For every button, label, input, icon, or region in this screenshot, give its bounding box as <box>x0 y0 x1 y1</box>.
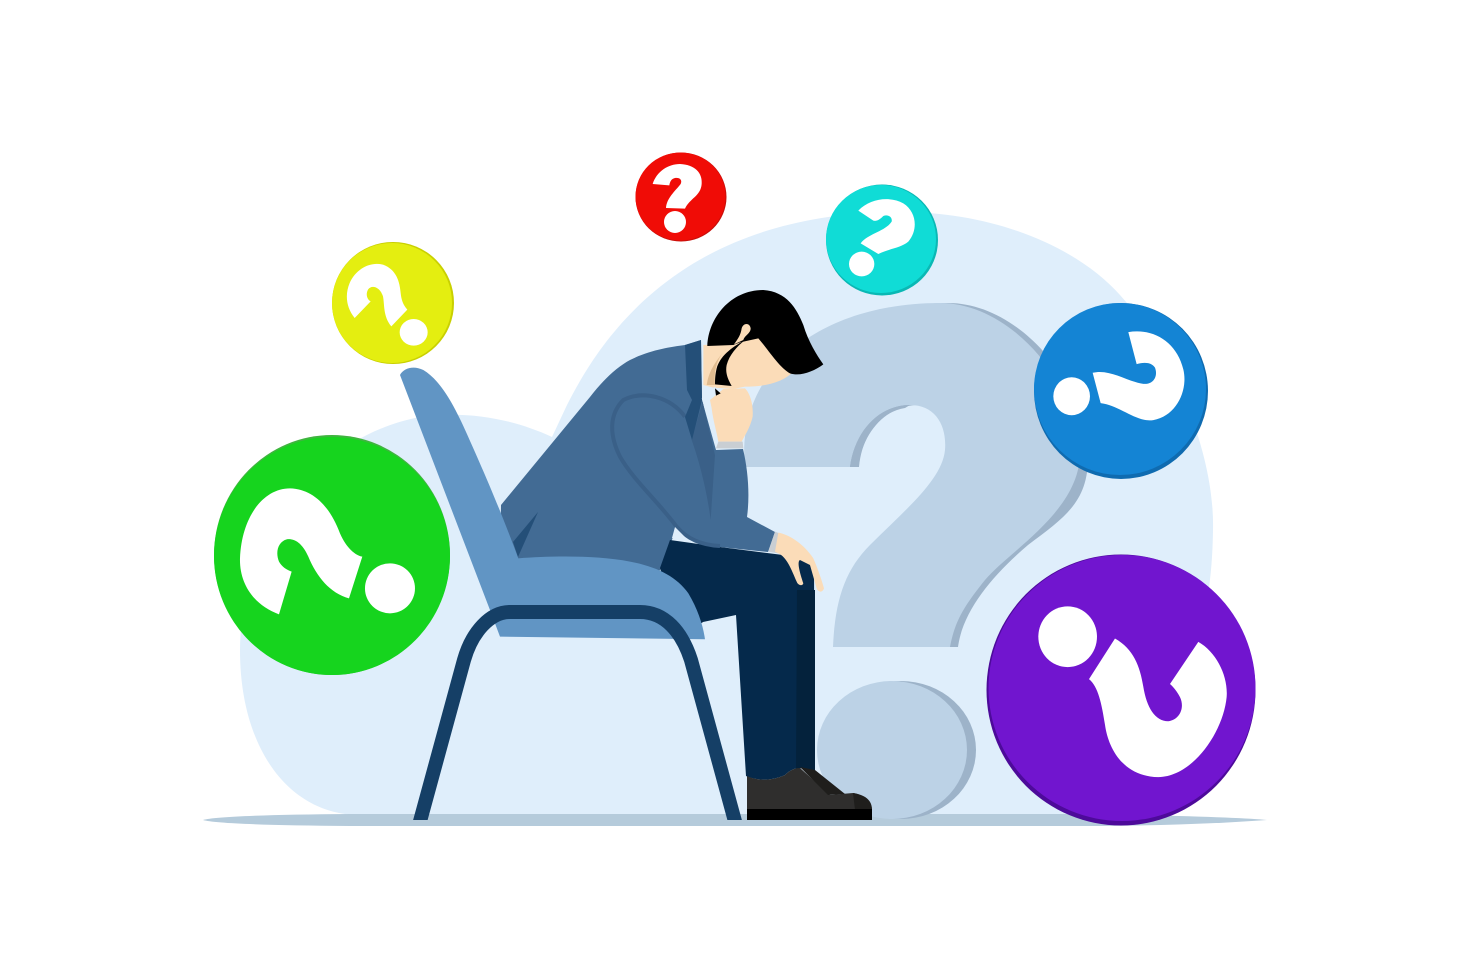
hair <box>707 290 823 374</box>
jacket sleeve outline <box>612 395 720 546</box>
red question bubble <box>636 152 726 242</box>
head <box>703 290 823 389</box>
shirt collar <box>702 387 725 442</box>
large question mark <box>744 303 1088 819</box>
shoe sole <box>747 809 872 820</box>
shoe shade <box>800 767 872 810</box>
face <box>703 337 792 389</box>
yellow question bubble <box>332 242 454 364</box>
trousers <box>660 540 815 780</box>
chair frame <box>419 612 736 825</box>
background blob <box>240 212 1213 815</box>
trouser shade <box>796 590 815 772</box>
jacket arm <box>612 395 775 552</box>
ground shadow <box>203 814 1267 826</box>
blue question bubble <box>1034 303 1208 479</box>
illustration <box>203 152 1266 826</box>
teal question bubble <box>826 184 938 296</box>
neck shade <box>707 348 727 385</box>
green question bubble <box>214 435 450 675</box>
chin hand <box>710 388 753 442</box>
sideburn <box>715 340 745 386</box>
chair <box>400 368 736 825</box>
gap under arm <box>672 527 688 540</box>
purple question bubble <box>986 554 1256 826</box>
ear <box>734 324 751 344</box>
chair back and seat <box>400 368 705 639</box>
shirt cuff <box>716 442 743 448</box>
resting hand <box>768 532 824 592</box>
lapel <box>685 340 702 440</box>
fingers <box>775 533 824 592</box>
jacket inner shade <box>692 402 715 520</box>
jacket torso <box>500 340 715 580</box>
shoe <box>747 768 872 820</box>
fingertip shadow <box>715 388 721 396</box>
resting cuff <box>768 532 783 553</box>
businessman <box>500 290 872 820</box>
jacket pocket fold <box>513 512 538 557</box>
